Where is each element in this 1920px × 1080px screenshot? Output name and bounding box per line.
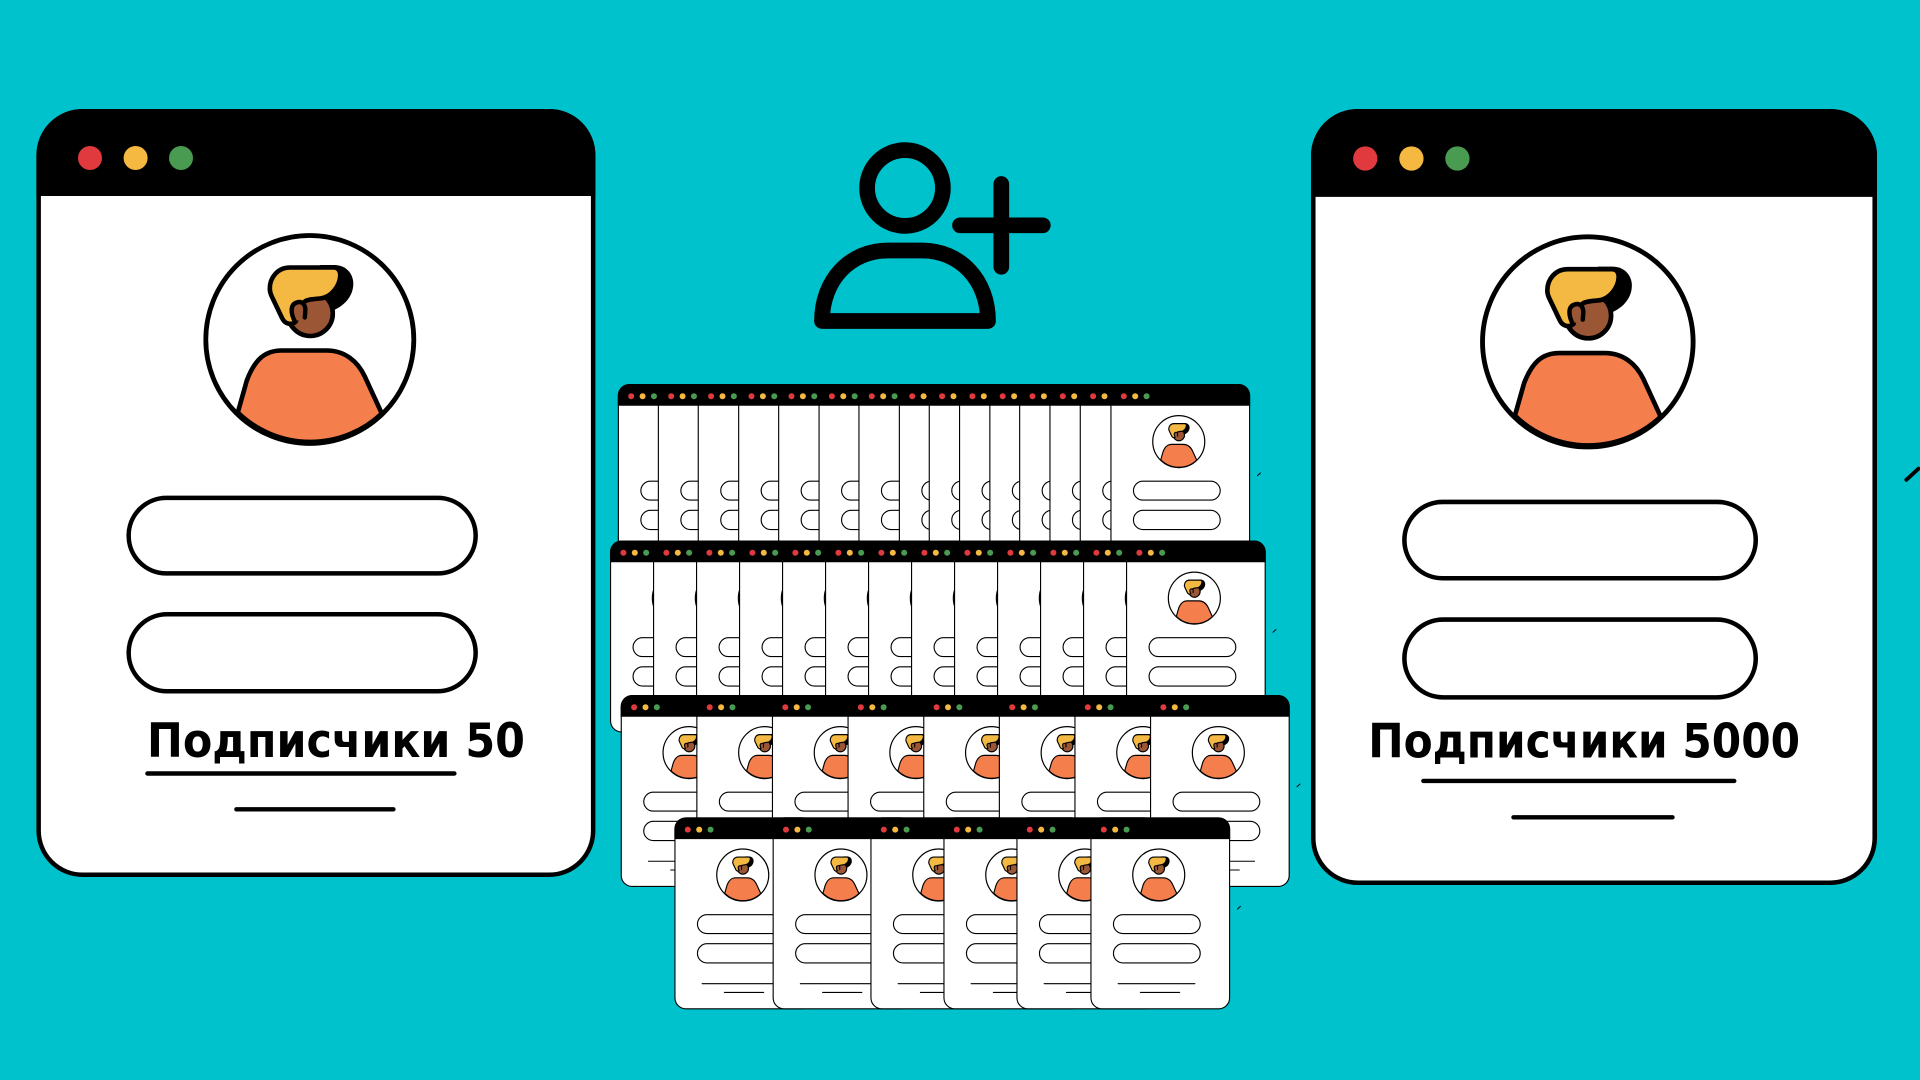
follower count label: Подписчики 50 [147,714,525,769]
window frame [39,111,593,875]
underline 2 [236,807,393,811]
input field 2 [129,614,476,691]
window title bar [36,109,595,196]
input field 1 [1404,502,1756,578]
card row 2 [610,540,1276,732]
follower count label: Подписчики 5000 [1368,714,1800,769]
panel: cluster of follower cards [610,384,1300,1009]
icon: user avatar [206,236,414,444]
underline 1 [147,771,454,776]
input field 1 [129,498,476,573]
window control dots [78,146,193,170]
window title bar [1311,109,1877,197]
underline 1 [1423,779,1734,783]
window control dots [1353,146,1470,171]
input field 2 [1404,620,1756,697]
underline 2 [1514,815,1672,819]
window frame [1313,111,1875,883]
card row 4 [674,817,1240,1009]
card row 3 [621,695,1300,886]
card row 1 [618,384,1260,575]
stray tick mark [1906,469,1918,480]
panel: right profile window, 5000 followers [1311,109,1918,883]
icon: user avatar [1483,237,1693,447]
panel: left profile window, 50 followers [36,109,595,875]
icon: add user [822,150,1043,321]
